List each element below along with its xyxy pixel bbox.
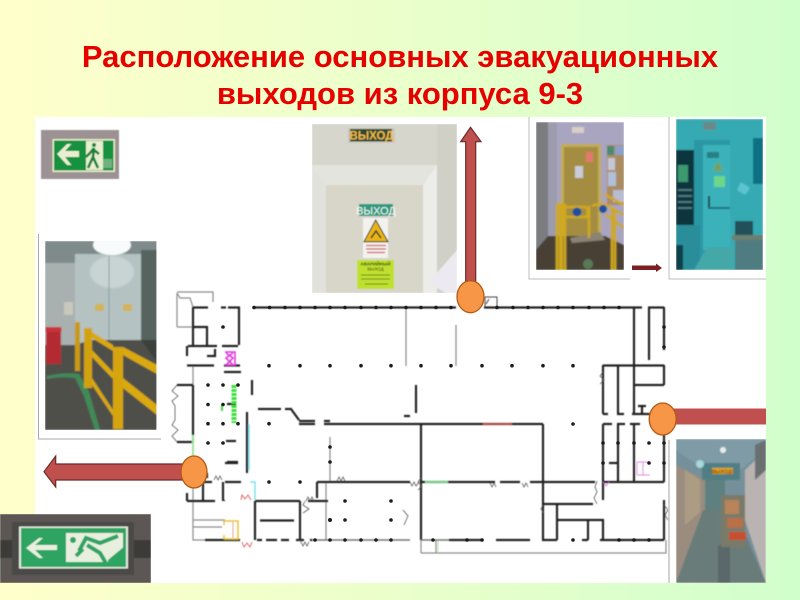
- photo frame: lower right: [668, 440, 670, 583]
- arrow: left from west exit: [44, 456, 185, 487]
- photo: teal door: [676, 119, 763, 270]
- title: [82, 39, 718, 110]
- photo frame: left photo: [38, 234, 161, 439]
- photo frames: right top photos: [529, 117, 766, 279]
- arrow: small dark arrow between photos: [632, 264, 662, 272]
- photo: exit sign, top left: [41, 130, 119, 179]
- floor plan: [172, 292, 668, 553]
- sign: emergency exit notice: АВАРИЙНЫЙ: [361, 260, 390, 266]
- photo: door behind yellow gate: [536, 122, 624, 270]
- exit marker: west: [181, 456, 207, 488]
- plan: column dots: [206, 306, 666, 542]
- title: Расположение основных эвакуационных: [82, 39, 718, 74]
- sign: ВЫХОД on door: ВЫХОД: [356, 206, 396, 218]
- sign: slip warning: [363, 218, 388, 258]
- plan: grey thin walls: [177, 292, 666, 553]
- photo: corridor with yellow railing: [45, 235, 157, 430]
- photo: emergency door with ВЫХОД signs: [312, 124, 457, 293]
- plan: main thick walls: [177, 307, 664, 540]
- exit marker: north: [457, 281, 484, 313]
- arrow: up from north exit: [461, 127, 481, 290]
- sign: emergency exit notice: ВЫХОД: [367, 266, 384, 272]
- title: выходов из корпуса 9-3: [217, 76, 583, 110]
- photo: corridor with lit exit sign: [676, 439, 766, 583]
- arrow: right from east exit: [672, 408, 766, 424]
- plan: light bottom wall segments: [312, 539, 449, 541]
- sign: illuminated exit: ВЫХОД!: [711, 469, 734, 475]
- plan: coloured fittings: [225, 352, 235, 365]
- photo: exit sign, bottom left: [0, 514, 151, 583]
- sign: ВЫХОД above door: ВЫХОД: [350, 130, 393, 142]
- exit marker: east: [649, 403, 676, 435]
- white plan panel: [35, 117, 766, 583]
- plan: zigzag door symbols: [172, 372, 668, 546]
- sign: emergency exit notice: [357, 260, 394, 289]
